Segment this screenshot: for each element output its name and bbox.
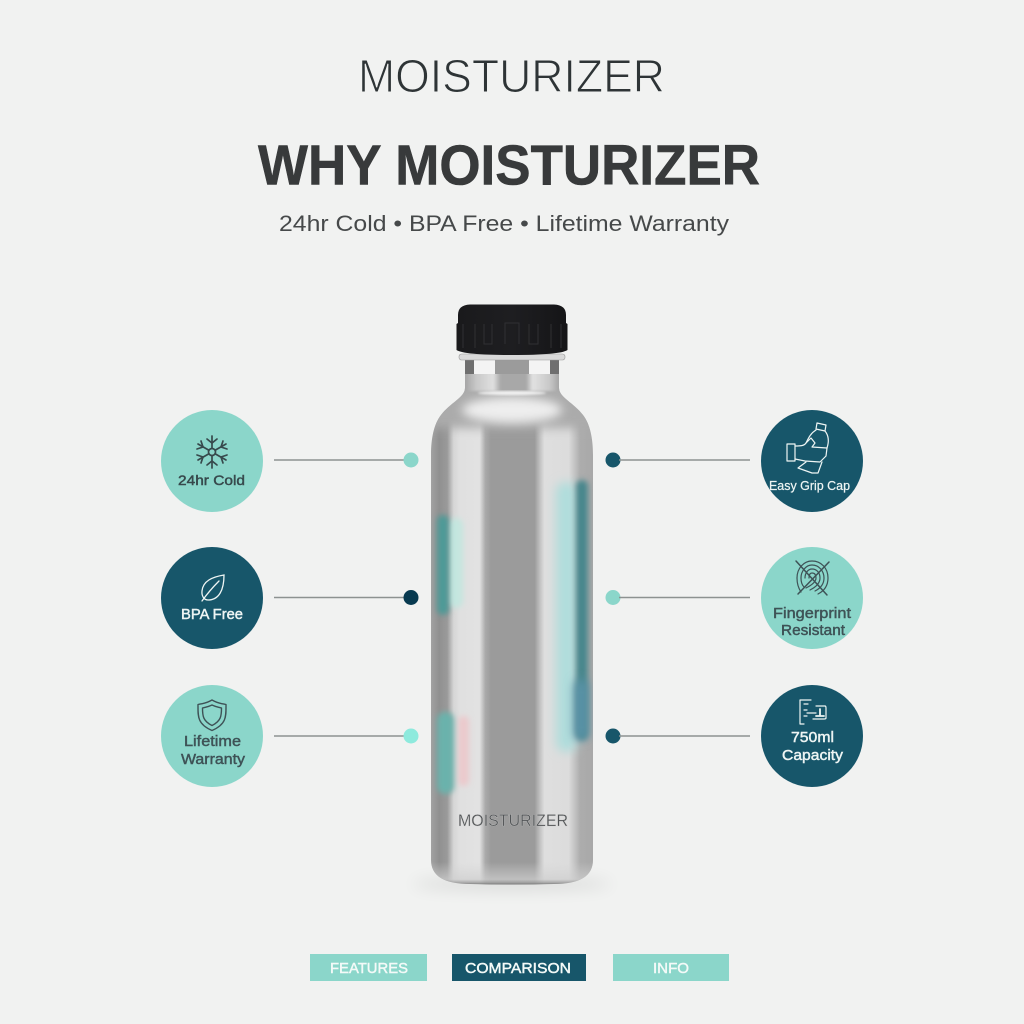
- tab: Features: [310, 954, 427, 981]
- feature: 750ml Capacity: [761, 685, 863, 787]
- connector: 750ml Capacity: [606, 728, 750, 744]
- connector: 24hr Cold: [274, 452, 418, 468]
- heading: WHY MOISTURIZER: [258, 134, 760, 198]
- brand title: MOISTURIZER: [358, 50, 665, 102]
- bottle shadow: [412, 878, 612, 890]
- label: BPA Free: [181, 607, 243, 623]
- label: Lifetime: [184, 733, 241, 750]
- feature: 24hr Cold: [161, 410, 263, 512]
- subtitle: 24hr Cold • BPA Free • Lifetime Warranty: [279, 211, 730, 236]
- teal reflections: [449, 518, 463, 608]
- bottle body: [431, 360, 593, 884]
- label: Fingerprint: [773, 605, 852, 622]
- tab: Features: FEATURES: [330, 960, 408, 977]
- cap ring: [459, 354, 565, 360]
- icon: capacity gauge: [800, 700, 826, 724]
- shoulder shading: [435, 388, 590, 433]
- badge: [761, 685, 863, 787]
- feature: Easy Grip Cap: [761, 410, 863, 512]
- badge: [761, 547, 863, 649]
- label: 24hr Cold: [178, 472, 245, 488]
- feature: 750ml Capacity: Capacity: [782, 747, 844, 764]
- icon: crossed fingerprint: [796, 561, 829, 595]
- connector: BPA Free: [274, 590, 418, 605]
- badge: [161, 547, 263, 649]
- icon: hand gripping bottle: [787, 423, 828, 473]
- connector: Fingerprint Resistant: [606, 590, 750, 605]
- badge: [761, 410, 863, 512]
- icon: shield: [198, 700, 226, 730]
- badge: [161, 685, 263, 787]
- icon: leaf: [202, 575, 224, 601]
- connector: Easy Grip Cap: [606, 452, 750, 468]
- bottle: [431, 304, 593, 893]
- tab: Comparison: [452, 954, 586, 981]
- bottle label: MOISTURIZER: [458, 811, 568, 830]
- tab: Info: INFO: [653, 960, 689, 977]
- neck: [464, 374, 560, 392]
- feature: Fingerprint Resistant: Resistant: [781, 622, 846, 639]
- cap grip ridges: [463, 323, 561, 348]
- feature: Lifetime Warranty: Warranty: [181, 751, 246, 768]
- neck window: [474, 360, 550, 374]
- icon: snowflake: [197, 436, 227, 468]
- label: Easy Grip Cap: [769, 479, 850, 493]
- feature: Lifetime Warranty: [161, 685, 263, 787]
- tab: Comparison: COMPARISON: [465, 960, 571, 977]
- cap: [456, 304, 568, 355]
- tab: Info: [613, 954, 729, 981]
- feature: Fingerprint Resistant: [761, 547, 863, 649]
- badge: [161, 410, 263, 512]
- connector: Lifetime Warranty: [274, 728, 418, 744]
- feature: BPA Free: [161, 547, 263, 649]
- label: 750ml: [791, 729, 834, 746]
